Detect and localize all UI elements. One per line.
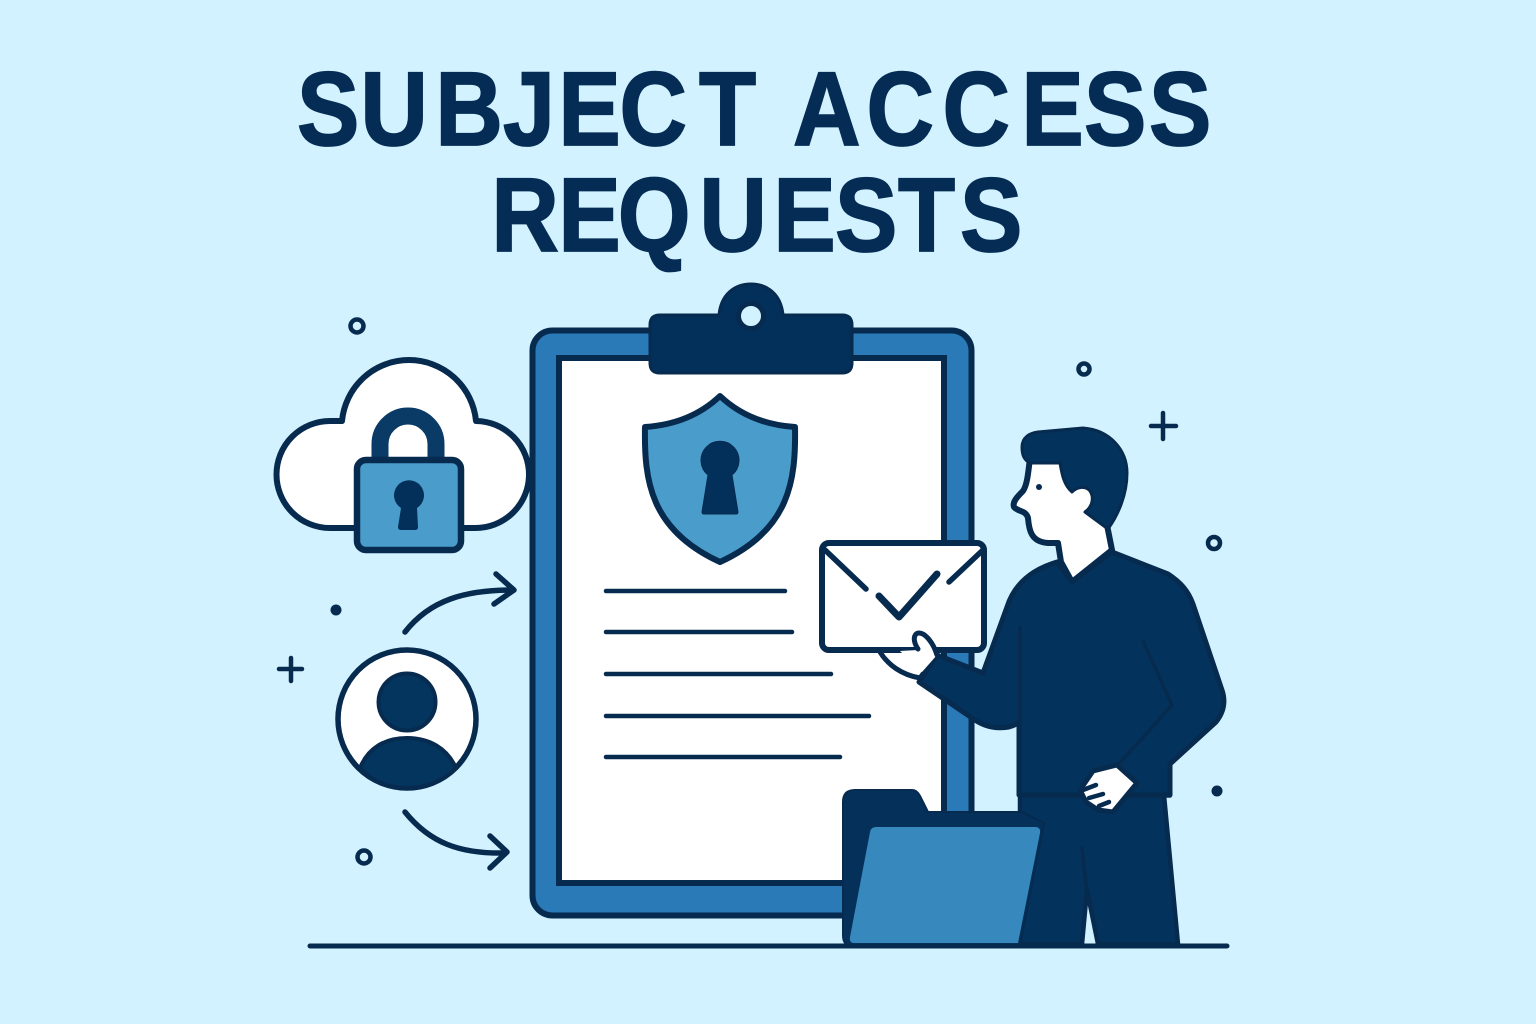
arrow: top bbox=[405, 574, 514, 632]
envelope bbox=[822, 543, 984, 650]
person torso and arms bbox=[919, 552, 1224, 795]
person eye bbox=[1036, 484, 1042, 490]
hand holding envelope bbox=[880, 640, 937, 678]
arrow: bottom bbox=[405, 812, 507, 868]
person bbox=[919, 428, 1224, 944]
folder bbox=[843, 790, 1044, 945]
padlock shackle bbox=[380, 416, 436, 462]
padlock keyhole bbox=[394, 480, 424, 530]
finger lines bbox=[1083, 785, 1109, 806]
thumb outline bbox=[914, 633, 937, 655]
clipboard clip bbox=[650, 284, 852, 373]
document text lines bbox=[606, 591, 869, 757]
clip hole bbox=[738, 304, 764, 328]
cloud with padlock bbox=[276, 360, 529, 550]
envelope checkmark bbox=[879, 574, 937, 617]
shield bbox=[645, 396, 795, 562]
user avatar bbox=[338, 650, 476, 788]
title: SUBJECT bbox=[297, 51, 756, 168]
folder front bbox=[850, 827, 1040, 943]
title bbox=[297, 51, 1211, 274]
avatar head bbox=[378, 674, 436, 730]
person face and neck bbox=[1014, 458, 1112, 582]
person trousers bbox=[1020, 795, 1178, 944]
title: ACCESS bbox=[793, 51, 1211, 168]
folder back bbox=[843, 790, 1044, 945]
avatar shoulders bbox=[360, 738, 456, 788]
padlock body bbox=[357, 460, 461, 550]
envelope flap bbox=[825, 550, 983, 589]
shield keyhole bbox=[701, 441, 739, 514]
person hand on hip bbox=[1080, 765, 1137, 812]
person hair bbox=[1022, 428, 1127, 529]
cloud bbox=[276, 360, 529, 528]
clothing fold lines bbox=[1020, 627, 1172, 893]
clipboard board bbox=[532, 330, 972, 916]
ground line bbox=[310, 944, 1227, 948]
clipboard paper bbox=[559, 358, 944, 883]
clipboard bbox=[532, 284, 972, 916]
title: REQUESTS bbox=[491, 157, 1022, 274]
thumb bbox=[900, 633, 937, 672]
decorative dots and plus signs bbox=[279, 320, 1222, 864]
